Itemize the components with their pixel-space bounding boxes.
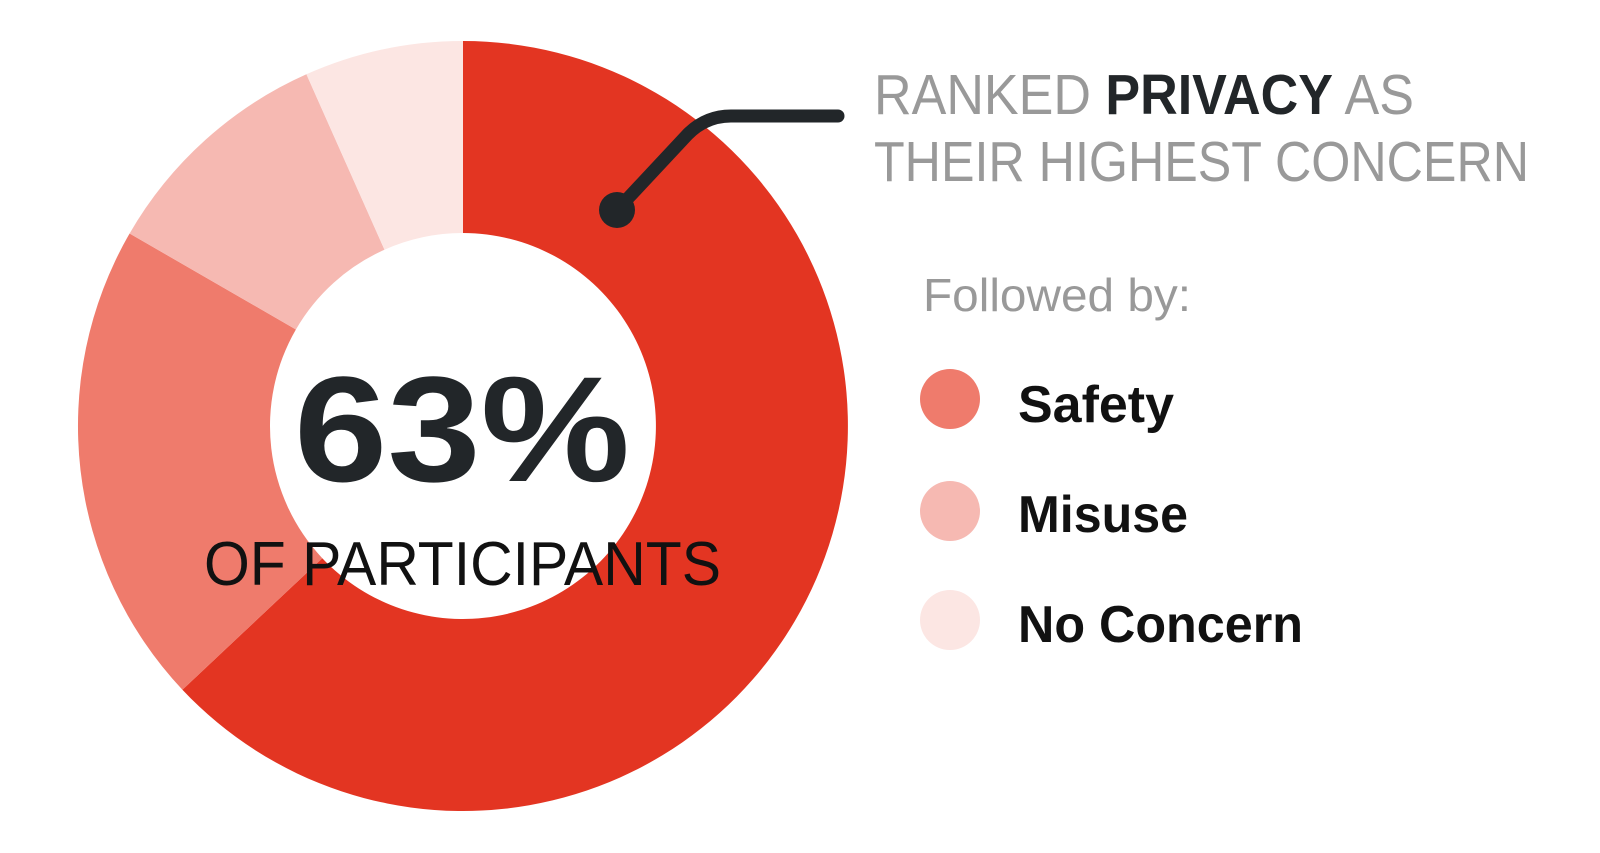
callout leader line xyxy=(599,116,838,228)
segment: safety xyxy=(78,234,322,690)
segment: no concern xyxy=(306,41,463,250)
legend item: safety xyxy=(920,369,1174,434)
followed by label: Followed by: xyxy=(923,269,1191,321)
legend item: misuse: Misuse xyxy=(1018,486,1188,544)
legend xyxy=(920,369,1303,654)
headline: RANKED PRIVACY AS xyxy=(874,63,1414,127)
big percentage: 63% xyxy=(294,345,630,513)
subtitle: of participants: OF PARTICIPANTS xyxy=(204,530,721,599)
legend item: safety: Safety xyxy=(1018,376,1174,434)
segment: misuse xyxy=(130,74,384,330)
headline xyxy=(874,63,1529,194)
donut chart xyxy=(78,41,848,811)
legend item: no concern: No Concern xyxy=(1018,596,1303,654)
legend item: no concern xyxy=(920,590,1303,654)
legend item: misuse xyxy=(920,481,1188,544)
headline: THEIR HIGHEST CONCERN xyxy=(874,130,1529,194)
segment: privacy 63% xyxy=(182,41,848,811)
